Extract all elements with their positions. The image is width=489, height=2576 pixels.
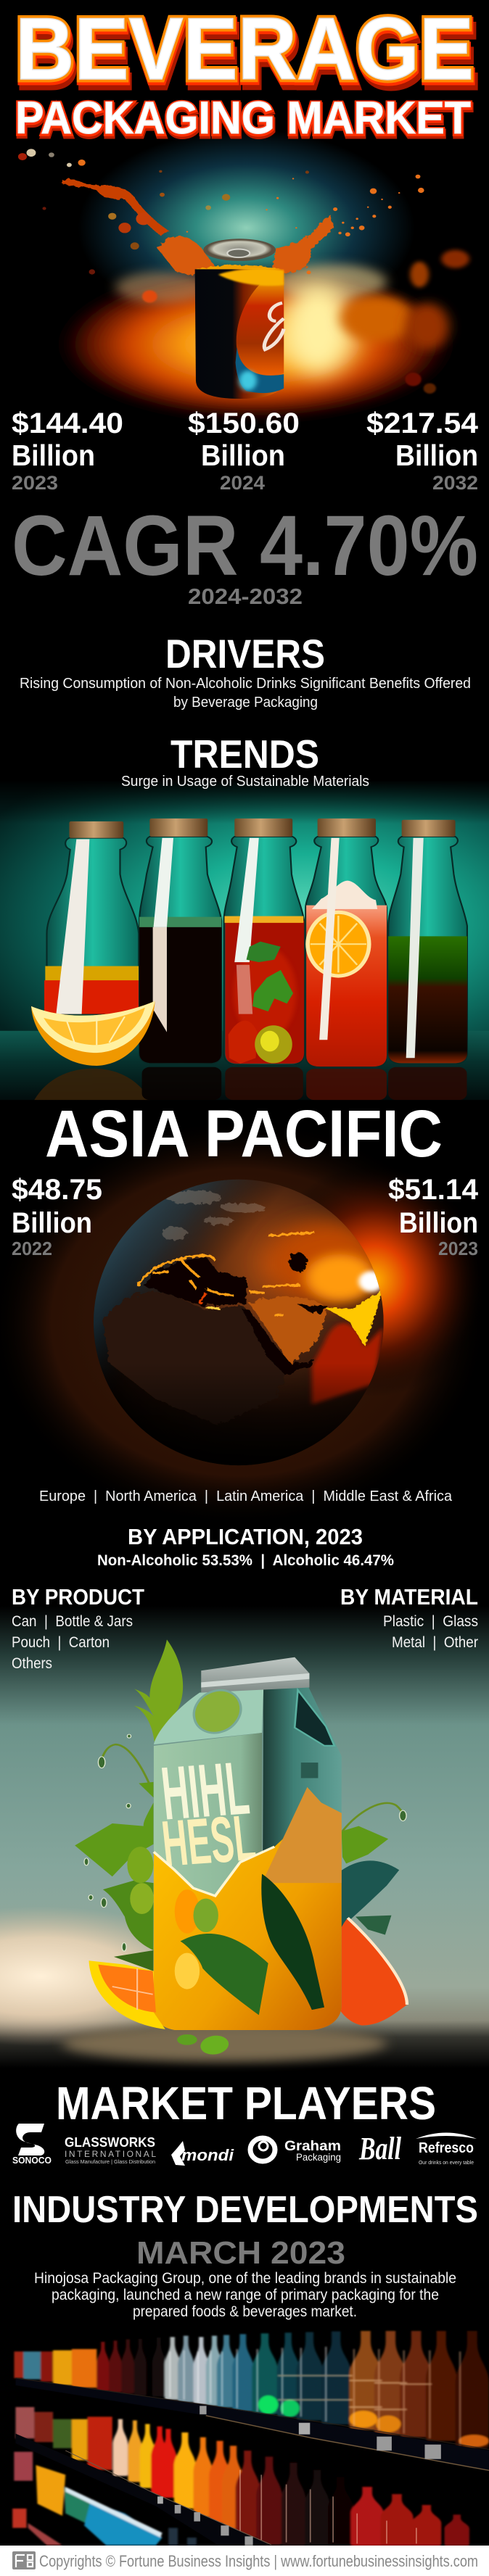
lit coast lines xyxy=(137,1233,315,1315)
bottle 4 xyxy=(305,819,387,1067)
heading: by application: BY APPLICATION, 2023 xyxy=(128,1524,363,1549)
logo: Mondi xyxy=(171,2141,234,2166)
logo: Graham Packaging xyxy=(250,2138,341,2163)
bottle 5 xyxy=(388,820,467,1064)
fade to black at top xyxy=(0,779,489,824)
fire glow xyxy=(53,250,469,422)
region heading: Asia Pacific: ASIA PACIFIC xyxy=(45,1097,443,1171)
logo: Graham Packaging: Packaging xyxy=(296,2151,341,2163)
footer band xyxy=(0,2546,489,2576)
development date: MARCH 2023 xyxy=(136,2235,345,2271)
reflections xyxy=(34,1067,467,1100)
heading: drivers: DRIVERS xyxy=(165,631,325,676)
drivers text xyxy=(20,676,471,711)
development text: packaging, launched a new range of primary packaging for the xyxy=(52,2287,439,2303)
teal backlight glow xyxy=(78,130,415,326)
soda can xyxy=(195,239,284,399)
development text: prepared foods & beverages market. xyxy=(133,2303,357,2320)
bottle 2 xyxy=(139,819,221,1064)
middle shelf bottles xyxy=(15,2407,469,2546)
logo: Refresco xyxy=(416,2133,477,2166)
juice level xyxy=(154,1787,342,2030)
by product block: Pouch | Carton xyxy=(12,1634,110,1651)
land: lit arabia xyxy=(250,1297,327,1366)
stat: 2024 market size xyxy=(188,407,300,494)
india xyxy=(324,1291,382,1346)
stat: region 2022: Billion xyxy=(12,1207,92,1239)
backdrop xyxy=(0,1606,489,2082)
title line: PACKAGING MARKET: PACKAGING MARKET xyxy=(15,94,471,144)
other regions list: Europe | North America | Latin America | Middle East & Africa xyxy=(39,1488,453,1504)
planet xyxy=(94,1179,387,1467)
lower shelf bottles xyxy=(12,2452,197,2546)
by material block: BY MATERIAL xyxy=(340,1584,478,1610)
dark halo xyxy=(0,1118,488,1527)
stat: 2032 market size: 2032 xyxy=(432,472,478,494)
logo: Sonoco: SONOCO xyxy=(12,2155,52,2166)
sun glow xyxy=(262,1164,487,1396)
stat: 2024 market size: 2024 xyxy=(220,472,265,494)
heading: trends: TRENDS xyxy=(170,732,319,776)
logo: Glassworks International: Glass Manufacture | Glass Distribution xyxy=(65,2160,155,2165)
juice carton image xyxy=(0,1606,489,2082)
vines and droplets xyxy=(102,1744,403,1831)
juice splash xyxy=(62,179,334,285)
black backdrop xyxy=(0,2320,489,2546)
bottles image xyxy=(0,779,489,1100)
stat: 2032 market size: Billion xyxy=(395,439,478,472)
by product block: Can | Bottle & Jars xyxy=(12,1613,133,1630)
top shelf edge xyxy=(15,2378,489,2471)
development text: Hinojosa Packaging Group, one of the leading brands in sustainable xyxy=(34,2270,456,2287)
land: central asia glow xyxy=(268,1221,387,1304)
top shelf bottle highlights xyxy=(170,2347,460,2445)
logo: Refresco: Refresco xyxy=(419,2140,474,2156)
stat: region 2023 xyxy=(388,1174,479,1259)
by product block: Others xyxy=(12,1655,52,1672)
logo: Graham Packaging: Graham xyxy=(284,2139,341,2154)
stat: 2024 market size: Billion xyxy=(201,439,285,472)
stat: 2023 market size: Billion xyxy=(12,439,95,472)
carton: HIHL xyxy=(157,1746,252,1836)
logo: Refresco: Our drinks on every table xyxy=(419,2161,474,2166)
by material block: Plastic | Glass xyxy=(383,1613,478,1630)
middle shelf edge xyxy=(15,2434,271,2546)
stat: region 2023: Billion xyxy=(399,1207,478,1239)
stat: region 2022: 2022 xyxy=(12,1238,52,1259)
carton xyxy=(154,1657,342,2030)
middle shelf bottle highlights xyxy=(240,2470,416,2543)
land: dark africa xyxy=(103,1291,290,1425)
footer logo xyxy=(12,2551,36,2569)
night fade xyxy=(137,1368,375,1465)
stat: region 2022: $48.75 xyxy=(12,1174,102,1206)
table surface xyxy=(0,1031,489,1100)
title: BEVERAGE PACKAGING MARKET xyxy=(15,0,477,146)
carton lettering xyxy=(157,1746,259,1880)
logo: Glassworks International: GLASSWORKS xyxy=(65,2135,155,2150)
logo: Ball: Ball xyxy=(358,2131,402,2166)
CAGR period: 2024-2032 xyxy=(188,584,303,609)
title line: PACKAGING MARKET: PACKAGING MARKET xyxy=(15,93,471,144)
hero image: exploding soda can xyxy=(18,130,469,422)
stat: 2032 market size: $217.54 xyxy=(366,407,479,439)
drivers text: Rising Consumption of Non-Alcoholic Drinks Significant Benefits Offered xyxy=(20,676,471,692)
trends text: Surge in Usage of Sustainable Materials xyxy=(121,774,369,790)
sunlight flare xyxy=(358,1271,384,1292)
stat: 2024 market size: $150.60 xyxy=(188,407,300,439)
by material block xyxy=(340,1584,478,1651)
arabian sea xyxy=(312,1323,384,1404)
stat: 2023 market size: $144.40 xyxy=(12,407,123,439)
stat: region 2022 xyxy=(12,1174,102,1259)
bottle 3 xyxy=(224,819,304,1064)
top shelf bottles xyxy=(14,2331,489,2448)
supermarket shelf image xyxy=(0,2320,489,2546)
floor light xyxy=(62,2026,387,2062)
stat: 2023 market size xyxy=(12,407,123,494)
development text xyxy=(34,2270,456,2320)
stat: 2032 market size xyxy=(366,407,479,494)
logo: Mondi: mondi xyxy=(181,2146,234,2164)
cloud patches at top xyxy=(163,1190,265,1241)
application split: Non-Alcoholic 53.53% | Alcoholic 46.47% xyxy=(97,1552,394,1569)
logo: Glassworks International xyxy=(65,2135,156,2165)
orange half right xyxy=(330,1918,407,2026)
carton: HESL xyxy=(159,1802,259,1880)
bottle 1 xyxy=(44,821,139,1014)
lemon wedge xyxy=(31,1001,155,1066)
by product block xyxy=(12,1584,144,1672)
logos row xyxy=(12,2124,477,2166)
logo: Sonoco xyxy=(12,2124,52,2166)
drivers text: by Beverage Packaging xyxy=(173,695,318,711)
by material block: Metal | Other xyxy=(392,1634,478,1651)
dark seas and europe xyxy=(144,1252,327,1376)
stat: 2023 market size: 2023 xyxy=(12,472,58,494)
globe image xyxy=(16,1140,474,1504)
logo: Glassworks International: INTERNATIONAL xyxy=(65,2149,156,2159)
splash droplets xyxy=(18,149,424,275)
heading: market players: MARKET PLAYERS xyxy=(56,2077,436,2129)
peach light xyxy=(0,1906,215,2046)
title line: PACKAGING MARKET: PACKAGING MARKET xyxy=(16,96,472,146)
pistachios xyxy=(177,2033,232,2058)
stat: region 2023: $51.14 xyxy=(388,1174,479,1206)
by product block: BY PRODUCT xyxy=(12,1584,144,1610)
teal backdrop xyxy=(0,781,489,1032)
background leaves xyxy=(75,1639,399,1971)
stat: region 2023: 2023 xyxy=(438,1238,478,1259)
orange half left xyxy=(89,1960,165,2029)
